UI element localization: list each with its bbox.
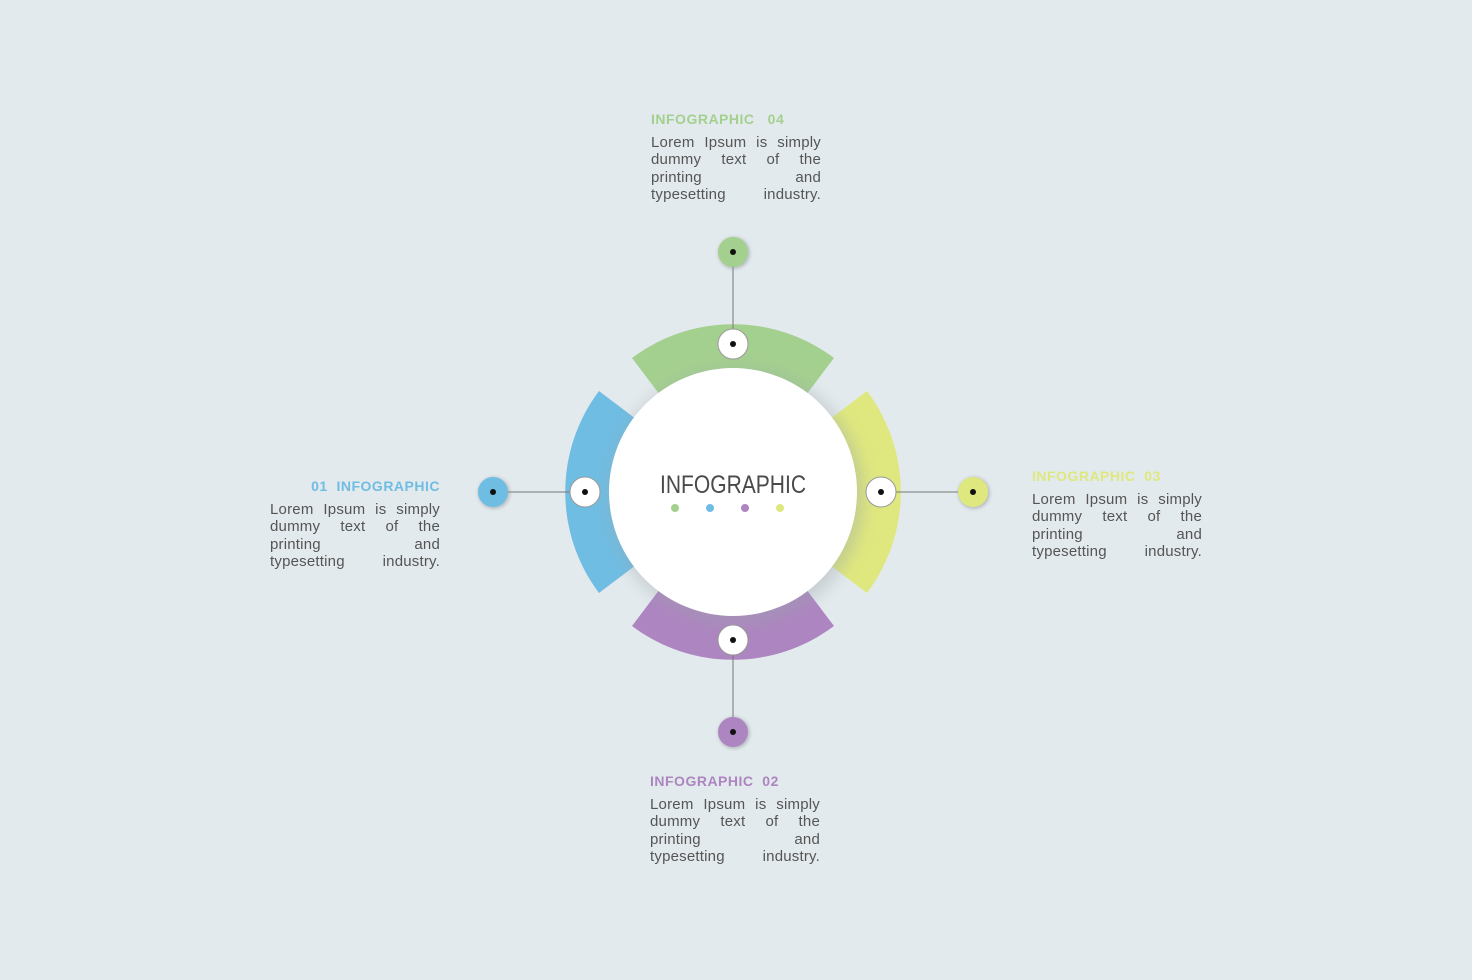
text block: 01 left: Lorem Ipsum is simply <box>270 501 440 518</box>
text block: 04 top: typesetting industry. <box>651 186 821 203</box>
connector lines <box>493 252 973 732</box>
text block: 01 left: 01 INFOGRAPHIC <box>311 478 440 494</box>
arc: green top <box>632 324 834 444</box>
text block: 04 top: Lorem Ipsum is simply <box>651 134 821 151</box>
text block: 03 right: printing and <box>1032 526 1202 543</box>
text block: 02 bottom: INFOGRAPHIC 02 <box>650 773 779 789</box>
outer marker dots <box>478 237 990 749</box>
text block: 02 bottom: typesetting industry. <box>650 848 820 865</box>
text block: 01 left: printing and <box>270 536 440 553</box>
text block: 03 right: Lorem Ipsum is simply <box>1032 491 1202 508</box>
text block: 01 left: typesetting industry. <box>270 553 440 570</box>
text block: 02 bottom: dummy text of the <box>650 813 820 830</box>
text block: 04 top: dummy text of the <box>651 151 821 168</box>
text block: 04 top: INFOGRAPHIC 04 <box>651 111 784 127</box>
inner white nodes <box>570 329 896 655</box>
center title: INFOGRAPHIC <box>660 471 806 499</box>
text block: 03 right <box>1032 468 1202 560</box>
arc: blue left <box>565 391 685 593</box>
text block: 04 top: printing and <box>651 169 821 186</box>
text block: 03 right: typesetting industry. <box>1032 543 1202 560</box>
text block: 02 bottom: Lorem Ipsum is simply <box>650 796 820 813</box>
arc: yellow right <box>781 391 901 593</box>
text block: 01 left <box>270 478 440 570</box>
center circle <box>608 368 864 624</box>
text block: 01 left: dummy text of the <box>270 518 440 535</box>
text block: 02 bottom <box>650 773 820 865</box>
arc: purple bottom <box>632 540 834 660</box>
text block: 03 right: INFOGRAPHIC 03 <box>1032 468 1161 484</box>
text block: 03 right: dummy text of the <box>1032 508 1202 525</box>
text block: 04 top <box>651 111 821 203</box>
text block: 02 bottom: printing and <box>650 831 820 848</box>
color dots <box>671 504 784 512</box>
